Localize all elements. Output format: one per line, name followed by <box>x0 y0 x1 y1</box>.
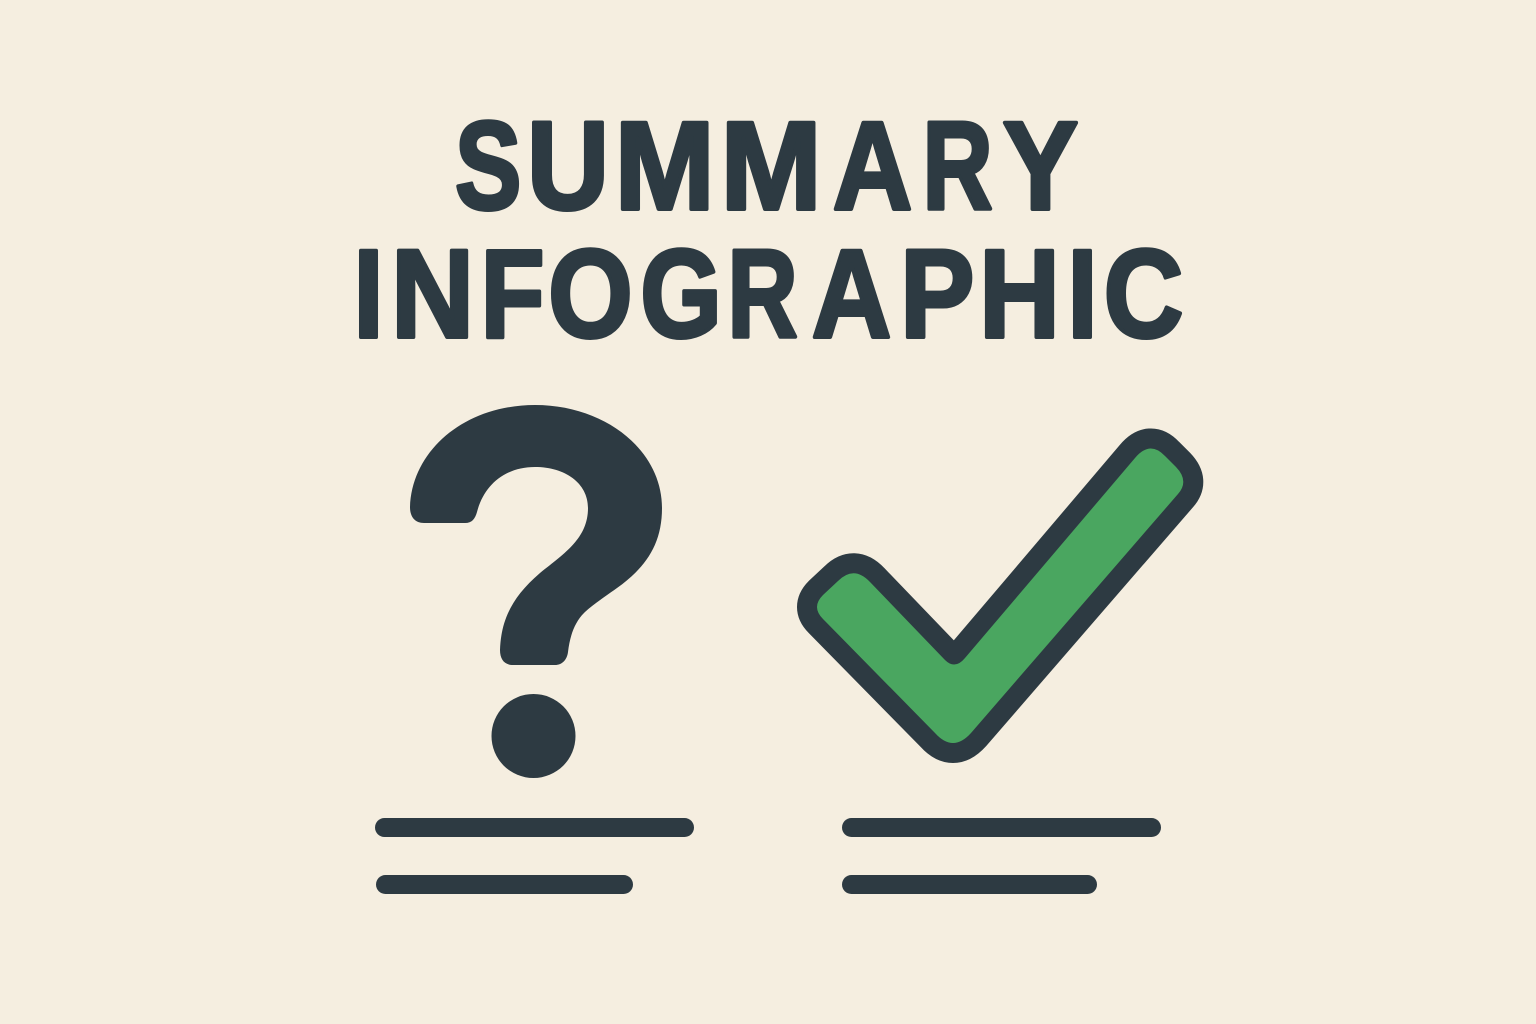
title line 1 <box>455 95 1078 236</box>
title line 2: I <box>354 224 384 364</box>
title line 2: C <box>1104 223 1183 364</box>
title line 1: Y <box>1003 97 1078 236</box>
title line 2: I <box>1068 224 1098 364</box>
title line 1: M <box>721 97 822 236</box>
icon: question mark <box>410 405 662 778</box>
icon: green check mark <box>817 448 1183 743</box>
title line 2: O <box>548 224 633 364</box>
title line 1: R <box>922 96 993 236</box>
title <box>354 95 1183 364</box>
title line 2: P <box>900 225 974 364</box>
title line 2: G <box>640 225 722 364</box>
title line 2: R <box>728 224 798 364</box>
title line 1: S <box>455 96 521 236</box>
title line 1: A <box>833 95 912 236</box>
title line 2 <box>354 223 1183 364</box>
title line 2: H <box>979 225 1060 364</box>
title line 2: N <box>391 225 474 364</box>
title line 1: M <box>615 96 715 236</box>
text placeholder lines: question <box>375 818 694 894</box>
title line 1: U <box>527 97 609 236</box>
title line 2: F <box>481 225 544 364</box>
title line 2: A <box>812 223 891 364</box>
text placeholder lines: answer <box>842 818 1161 894</box>
